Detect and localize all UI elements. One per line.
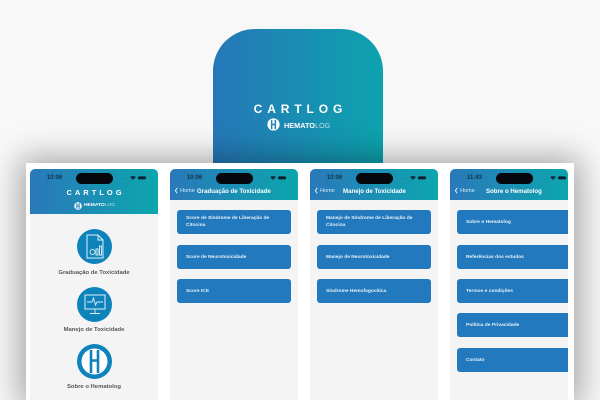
notch xyxy=(496,173,533,184)
app icon xyxy=(213,29,383,169)
header xyxy=(170,169,298,200)
white screenshot sheet xyxy=(26,163,574,400)
status icons xyxy=(263,176,286,180)
button xyxy=(177,210,291,234)
button: Manejo de Síndrome de Liberação de xyxy=(326,216,412,221)
button xyxy=(317,210,431,234)
status time: 10:06 xyxy=(327,175,342,181)
button: Referências dos estudos xyxy=(466,254,524,260)
screen title: Graduação de Toxicidade xyxy=(197,188,271,194)
button: Score ICE xyxy=(186,288,209,294)
phone: Graduação de Toxicidade xyxy=(170,169,298,400)
app icon wordmark: CARTLOG xyxy=(254,102,347,116)
button xyxy=(457,348,571,372)
header xyxy=(310,169,438,200)
status time: 10:06 xyxy=(187,175,202,181)
back link: ❮ Home xyxy=(314,188,335,194)
app icon hematolog logo xyxy=(267,118,330,131)
screen title: Manejo de Toxicidade xyxy=(343,188,406,194)
button xyxy=(317,245,431,269)
icon: document chart xyxy=(77,229,112,264)
status time: 10:06 xyxy=(47,175,62,181)
home hematolog logo: HEMATOLOG xyxy=(84,203,115,208)
notch xyxy=(216,173,253,184)
button xyxy=(177,245,291,269)
button xyxy=(457,279,571,303)
button xyxy=(457,210,571,234)
home hematolog logo xyxy=(74,202,115,210)
phone: Manejo de Toxicidade xyxy=(310,169,438,400)
button: Síndrome Hemofagocítica xyxy=(326,288,386,294)
label: Manejo de Toxicidade: Manejo de Toxicidade xyxy=(64,326,124,332)
phone: Sobre o Hematolog xyxy=(450,169,568,400)
button: Manejo de Neurotoxicidade xyxy=(326,254,390,260)
home header xyxy=(30,169,158,214)
icon: hematolog xyxy=(77,344,112,379)
button: Contato xyxy=(466,358,484,362)
notch xyxy=(356,173,393,184)
button: Termos e condições xyxy=(466,288,513,294)
button: Sobre o Hematolog xyxy=(466,220,511,224)
button: Citocina xyxy=(186,223,205,228)
notch xyxy=(76,173,113,184)
status icons xyxy=(403,176,426,180)
button: Score de Neurotoxicidade xyxy=(186,254,246,260)
header xyxy=(450,169,568,200)
button: Score de Síndrome de Liberação de xyxy=(186,216,269,221)
home wordmark: CARTLOG xyxy=(66,188,125,196)
label: Sobre o Hematolog: Sobre o Hematolog xyxy=(67,384,121,390)
button xyxy=(457,245,571,269)
button: Política de Privacidade xyxy=(466,322,519,328)
app icon hematolog logo: HEMATOLOG xyxy=(284,121,330,130)
button: Citocina xyxy=(326,223,345,228)
icon: monitor xyxy=(77,287,112,322)
status time: 11:43 xyxy=(467,175,482,181)
button xyxy=(317,279,431,303)
phone: home screen xyxy=(30,169,158,400)
button xyxy=(177,279,291,303)
screen title: Sobre o Hematolog xyxy=(486,188,542,194)
button xyxy=(457,313,571,337)
status icons xyxy=(123,176,146,180)
label: Graduação de Toxicidade: Graduação de Toxicidade xyxy=(58,270,130,276)
back link: ❮ Home xyxy=(174,188,195,194)
back link: ❮ Home xyxy=(454,188,475,194)
status icons xyxy=(543,176,566,180)
